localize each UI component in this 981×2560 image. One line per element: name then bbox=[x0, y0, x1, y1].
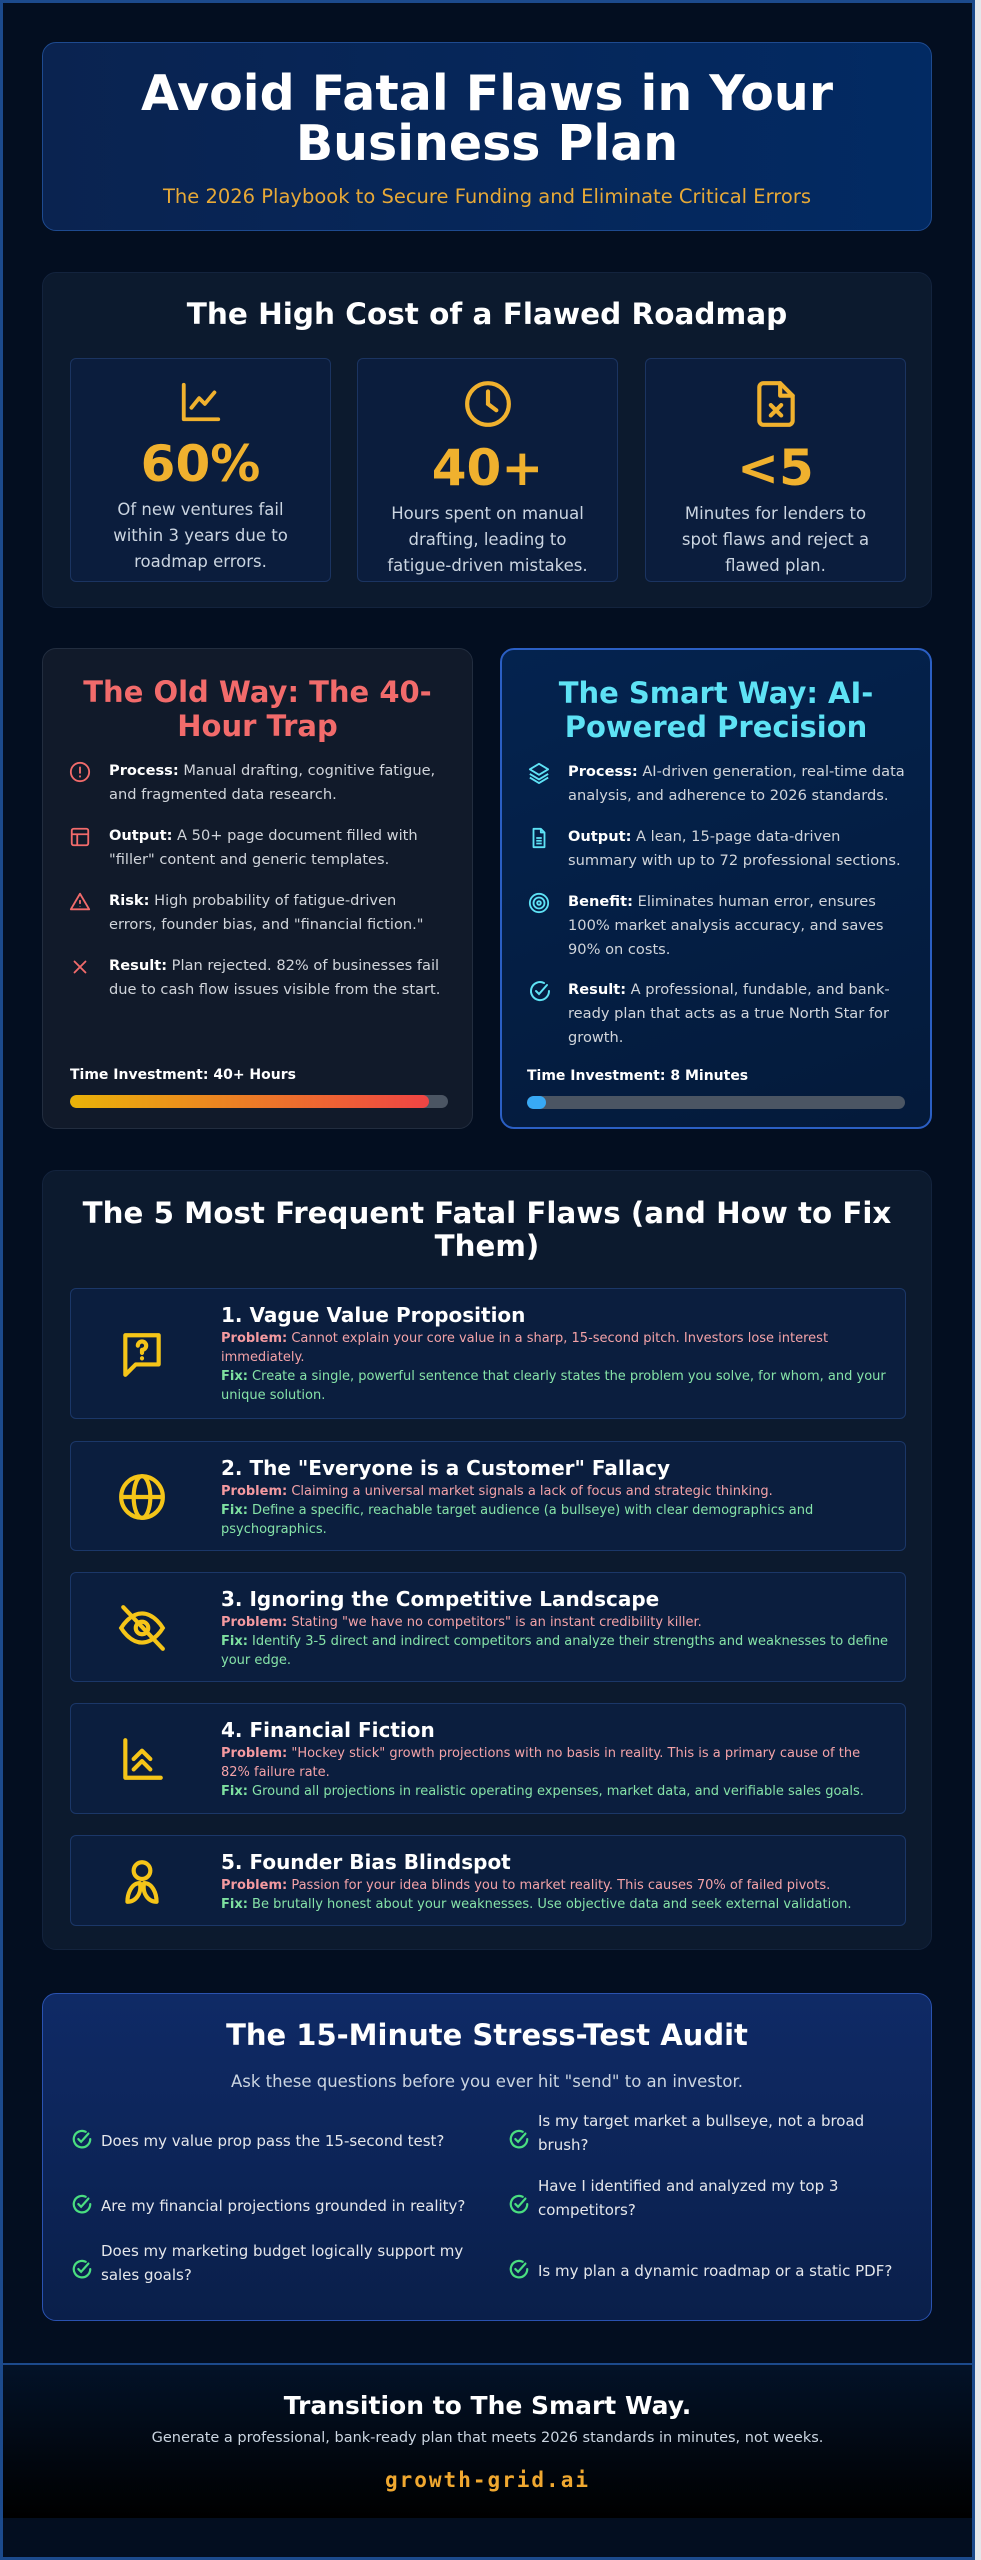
audit checklist: Is my target market a bullseye, not a broad brush? bbox=[538, 2112, 864, 2154]
heading: fatal flaws: The 5 Most Frequent Fatal Flaws (and How to Fix bbox=[83, 1196, 891, 1230]
flaw 4: Fix: Ground all projections in realistic operating expenses, market data, and verifiable sales goals. bbox=[221, 1784, 864, 1799]
footer bbox=[3, 2363, 972, 2518]
flaw 3: Fix: Identify 3-5 direct and indirect competitors and analyze their strengths and weaknesses to define your edge. bbox=[221, 1634, 888, 1668]
audit checklist: Are my financial projections grounded in reality? bbox=[101, 2197, 465, 2215]
flaw 4: 4. Financial Fiction bbox=[221, 1718, 435, 1742]
heading: audit: The 15-Minute Stress-Test Audit bbox=[226, 2018, 748, 2052]
smart item: output: Output: A lean, 15-page data-driven summary with up to 72 professional sections. bbox=[568, 828, 901, 869]
flaw 2: Fix: Define a specific, reachable target audience (a bullseye) with clear demographics and psychographics. bbox=[221, 1503, 813, 1537]
heading: smart way: Powered Precision bbox=[565, 710, 867, 744]
stat: <5: <5 bbox=[737, 439, 814, 497]
heading: fatal flaws bbox=[82, 1196, 891, 1263]
title bbox=[141, 65, 833, 172]
flaw 2 bbox=[70, 1441, 906, 1551]
footer heading: Transition to The Smart Way. bbox=[284, 2391, 691, 2420]
flaw 5 bbox=[70, 1835, 906, 1926]
heading: old way: Hour Trap bbox=[177, 709, 338, 743]
flaw 4 bbox=[70, 1703, 906, 1814]
stat: 60% bbox=[70, 358, 331, 582]
footer link: growth-grid.ai bbox=[385, 2468, 590, 2492]
heading: old way bbox=[83, 675, 432, 743]
header panel bbox=[42, 42, 932, 231]
smart item: benefit: Benefit: Eliminates human error, ensures 100% market analysis accuracy, and saves 90% on costs. bbox=[568, 893, 884, 958]
flaw 2: Problem: Claiming a universal market signals a lack of focus and strategic thinking. bbox=[221, 1484, 773, 1499]
flaw 1: 1. Vague Value Proposition bbox=[221, 1303, 525, 1327]
old item: result: Result: Plan rejected. 82% of businesses fail due to cash flow issues visible from the start. bbox=[109, 957, 440, 998]
flaw 3: Problem: Stating "we have no competitors" is an instant credibility killer. bbox=[221, 1615, 702, 1630]
panel: 5 fatal flaws bbox=[42, 1170, 932, 1950]
stat: 60%: 60% bbox=[141, 435, 260, 493]
time bar: old bbox=[70, 1067, 448, 1108]
time bar: smart: Time Investment: 8 Minutes bbox=[527, 1068, 748, 1084]
smart item: result: Result: A professional, fundable, and bank-ready plan that acts as a true North Star for growth. bbox=[568, 981, 890, 1046]
panel: high cost bbox=[42, 272, 932, 608]
flaw 2: 2. The "Everyone is a Customer" Fallacy bbox=[221, 1456, 670, 1480]
heading: high cost: The High Cost of a Flawed Roadmap bbox=[187, 297, 787, 331]
footer text: Generate a professional, bank-ready plan that meets 2026 standards in minutes, not weeks. bbox=[152, 2430, 823, 2446]
flaw 5: Fix: Be brutally honest about your weaknesses. Use objective data and seek external validation. bbox=[221, 1897, 852, 1912]
subtitle: The 2026 Playbook to Secure Funding and Eliminate Critical Errors bbox=[163, 185, 811, 208]
stat: 40+ bbox=[357, 358, 618, 582]
time bar: old: Time Investment: 40+ Hours bbox=[70, 1067, 296, 1083]
heading: old way: The Old Way: The 40- bbox=[83, 675, 432, 709]
audit checklist: Have I identified and analyzed my top 3 competitors? bbox=[538, 2177, 838, 2219]
audit checklist: Does my value prop pass the 15-second test? bbox=[101, 2132, 444, 2150]
old item: risk: Risk: High probability of fatigue-driven errors, founder bias, and "financial fiction." bbox=[109, 892, 423, 933]
panel: old way bbox=[42, 648, 473, 1129]
stat: 60%: Of new ventures fail within 3 years due to roadmap errors. bbox=[113, 500, 288, 571]
panel: smart way bbox=[500, 648, 932, 1129]
flaw 3 bbox=[70, 1572, 906, 1682]
stat: <5 bbox=[645, 358, 906, 582]
title: Avoid Fatal Flaws in Your bbox=[141, 65, 833, 122]
audit checklist: Does my marketing budget logically support my sales goals? bbox=[101, 2242, 463, 2284]
panel: stress-test audit bbox=[42, 1993, 932, 2321]
title: Business Plan bbox=[296, 115, 678, 172]
audit checklist: Is my plan a dynamic roadmap or a static PDF? bbox=[538, 2262, 892, 2280]
heading: fatal flaws: Them) bbox=[435, 1229, 539, 1263]
flaw 4: Problem: "Hockey stick" growth projections with no basis in reality. This is a primary cause of the 82% failure rate. bbox=[221, 1746, 860, 1780]
time bar: smart bbox=[527, 1068, 905, 1109]
heading: smart way bbox=[558, 676, 873, 744]
old item: process: Process: Manual drafting, cognitive fatigue, and fragmented data research. bbox=[109, 762, 435, 803]
flaw 1: Problem: Cannot explain your core value in a sharp, 15-second pitch. Investors lose interest immediately. bbox=[221, 1331, 828, 1365]
flaw 5: 5. Founder Bias Blindspot bbox=[221, 1850, 511, 1874]
flaw 1: Fix: Create a single, powerful sentence that clearly states the problem you solve, for whom, and your unique solution. bbox=[221, 1369, 886, 1403]
audit subtitle: Ask these questions before you ever hit "send" to an investor. bbox=[231, 2072, 743, 2091]
heading: smart way: The Smart Way: AI- bbox=[559, 676, 873, 710]
stat: <5: Minutes for lenders to spot flaws and reject a flawed plan. bbox=[682, 504, 869, 575]
flaw 1 bbox=[70, 1288, 906, 1419]
flaw 5: Problem: Passion for your idea blinds you to market reality. This causes 70% of failed pivots. bbox=[221, 1878, 830, 1893]
stat: 40+: Hours spent on manual drafting, leading to fatigue-driven mistakes. bbox=[387, 504, 588, 575]
old item: output: Output: A 50+ page document filled with "filler" content and generic templates. bbox=[109, 827, 418, 868]
smart item: process: Process: AI-driven generation, real-time data analysis, and adherence to 2026 standards. bbox=[568, 763, 905, 804]
stat: 40+: 40+ bbox=[432, 439, 543, 497]
audit checklist bbox=[72, 2112, 892, 2284]
flaw 3: 3. Ignoring the Competitive Landscape bbox=[221, 1587, 659, 1611]
